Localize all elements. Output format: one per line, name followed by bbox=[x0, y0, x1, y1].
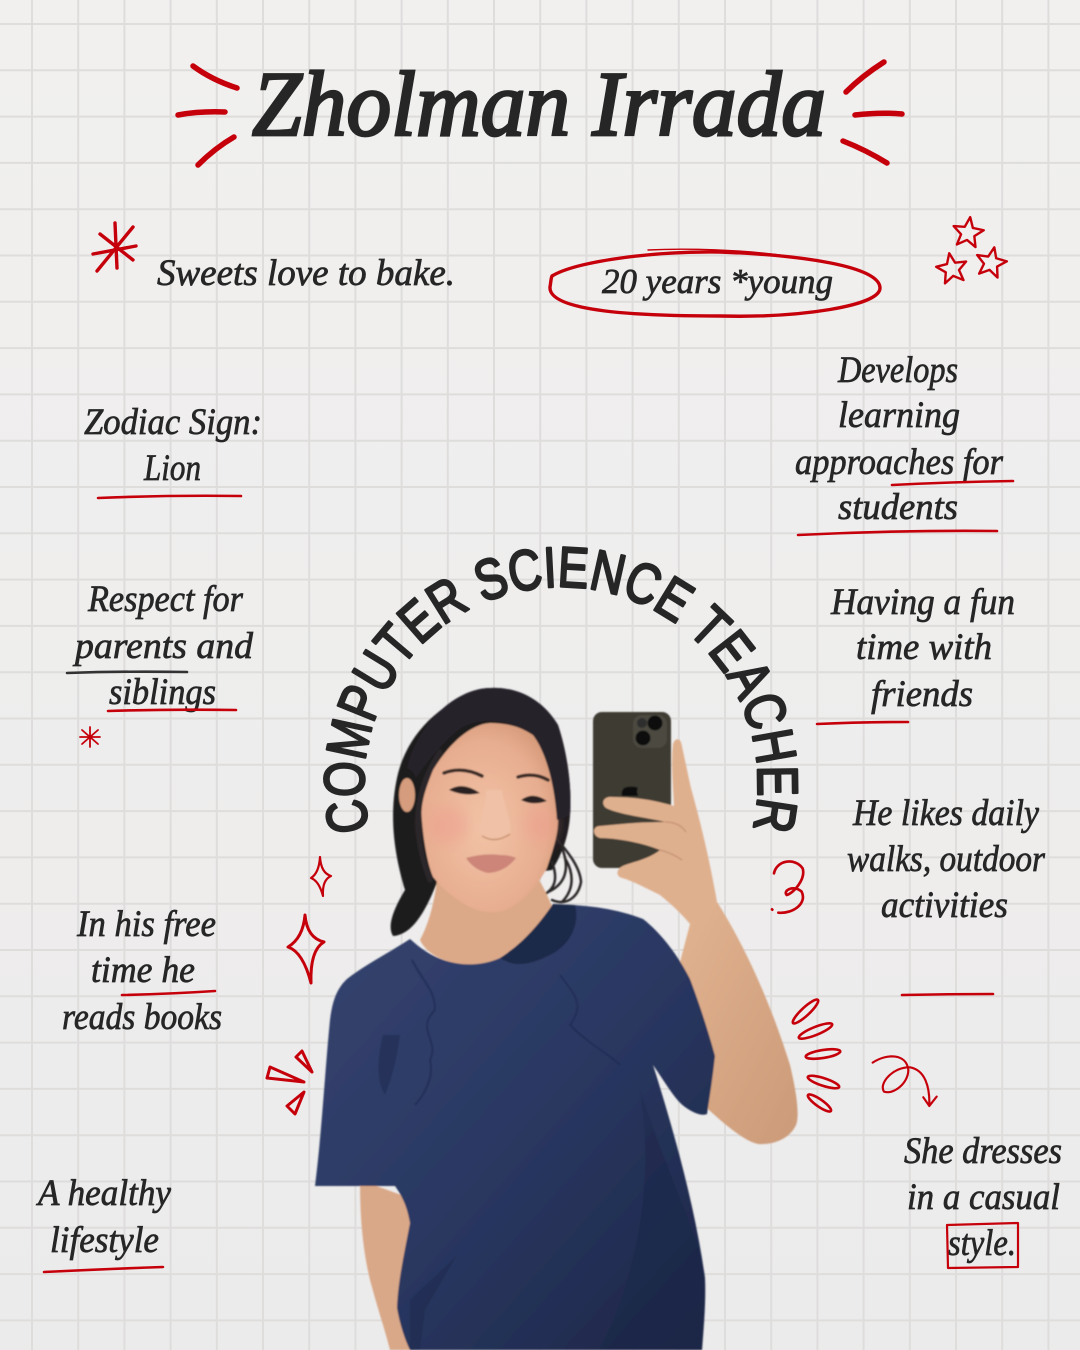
curved heading: computer science teacher: COMPUTER SCIENCE TEACHER bbox=[323, 546, 799, 832]
mouth bbox=[466, 854, 516, 873]
text: casual style: She dresses bbox=[904, 1131, 1062, 1172]
shirt bbox=[315, 904, 715, 1350]
face bbox=[422, 723, 559, 912]
text: respect for parents and siblings bbox=[67, 579, 253, 713]
text: having a fun: Having a fun bbox=[830, 582, 1015, 623]
text: daily walks: walks, outdoor bbox=[847, 839, 1046, 880]
text: develops learning approaches bbox=[795, 350, 1013, 535]
callout: age in circled ellipse: 20 years *young bbox=[602, 262, 833, 301]
icon: three stars bbox=[934, 215, 1009, 284]
front hair strands bbox=[407, 688, 570, 820]
icon: title rays left bbox=[178, 66, 237, 165]
text: respect for parents and siblings: Respect for bbox=[87, 579, 244, 620]
text: develops learning approaches: students bbox=[838, 487, 958, 528]
icon: small sparkle bbox=[311, 857, 331, 896]
text: having a fun: friends bbox=[871, 674, 973, 715]
text: develops learning approaches: Develops bbox=[837, 350, 958, 391]
icon: title rays right bbox=[843, 62, 902, 163]
text: develops learning approaches: learning bbox=[838, 395, 960, 436]
cheek blush bbox=[427, 807, 555, 843]
text: daily walks bbox=[847, 793, 1046, 995]
icon: red asterisk bbox=[93, 223, 136, 271]
text: zodiac sign: Lion bbox=[143, 448, 201, 489]
neck bbox=[420, 875, 552, 964]
text: casual style: in a casual bbox=[907, 1177, 1060, 1218]
icon: right petals burst bbox=[790, 997, 841, 1114]
text: zodiac sign bbox=[84, 402, 262, 498]
text: daily walks: He likes daily bbox=[852, 793, 1040, 834]
text: healthy lifestyle: lifestyle bbox=[50, 1220, 159, 1261]
icon: large sparkle bbox=[288, 915, 324, 983]
ear bbox=[399, 778, 415, 812]
icon: left burst bbox=[267, 1051, 312, 1114]
text: daily walks: activities bbox=[881, 885, 1008, 926]
shirt shadows bbox=[500, 904, 576, 964]
phone bbox=[593, 712, 671, 868]
text: respect for parents and siblings: siblings bbox=[109, 672, 216, 713]
title: Zholman Irrada bbox=[252, 53, 826, 155]
callout: age in circled ellipse bbox=[550, 249, 880, 316]
icon: spiral squiggle bbox=[772, 861, 803, 913]
hair back bbox=[391, 688, 570, 936]
right arm bbox=[670, 902, 798, 1144]
text: free time reading bbox=[62, 904, 222, 1038]
text: develops learning approaches: approaches for bbox=[795, 442, 1004, 483]
text: healthy lifestyle: A healthy bbox=[35, 1173, 172, 1214]
eyebrows and eyes bbox=[444, 770, 548, 780]
nose bbox=[480, 790, 511, 840]
text: healthy lifestyle bbox=[35, 1173, 172, 1272]
text: casual style: style. bbox=[948, 1223, 1016, 1264]
text: zodiac sign: Zodiac Sign: bbox=[84, 402, 262, 443]
text: free time reading: time he bbox=[91, 950, 195, 991]
icon: looping arrow bbox=[873, 1056, 937, 1106]
text: having a fun bbox=[817, 582, 1015, 724]
left lower arm bbox=[360, 1180, 420, 1350]
text: free time reading: reads books bbox=[62, 997, 222, 1038]
text: respect for parents and siblings: parents and bbox=[72, 626, 253, 667]
text: sweets: Sweets love to bake. bbox=[157, 253, 455, 294]
text: casual style bbox=[904, 1131, 1062, 1268]
person: selfie portrait bbox=[315, 688, 798, 1350]
text: free time reading: In his free bbox=[76, 904, 216, 945]
text: having a fun: time with bbox=[856, 627, 992, 668]
hand holding phone bbox=[594, 739, 717, 924]
icon: small asterisk bbox=[80, 727, 100, 747]
hair curls right bbox=[541, 838, 581, 902]
